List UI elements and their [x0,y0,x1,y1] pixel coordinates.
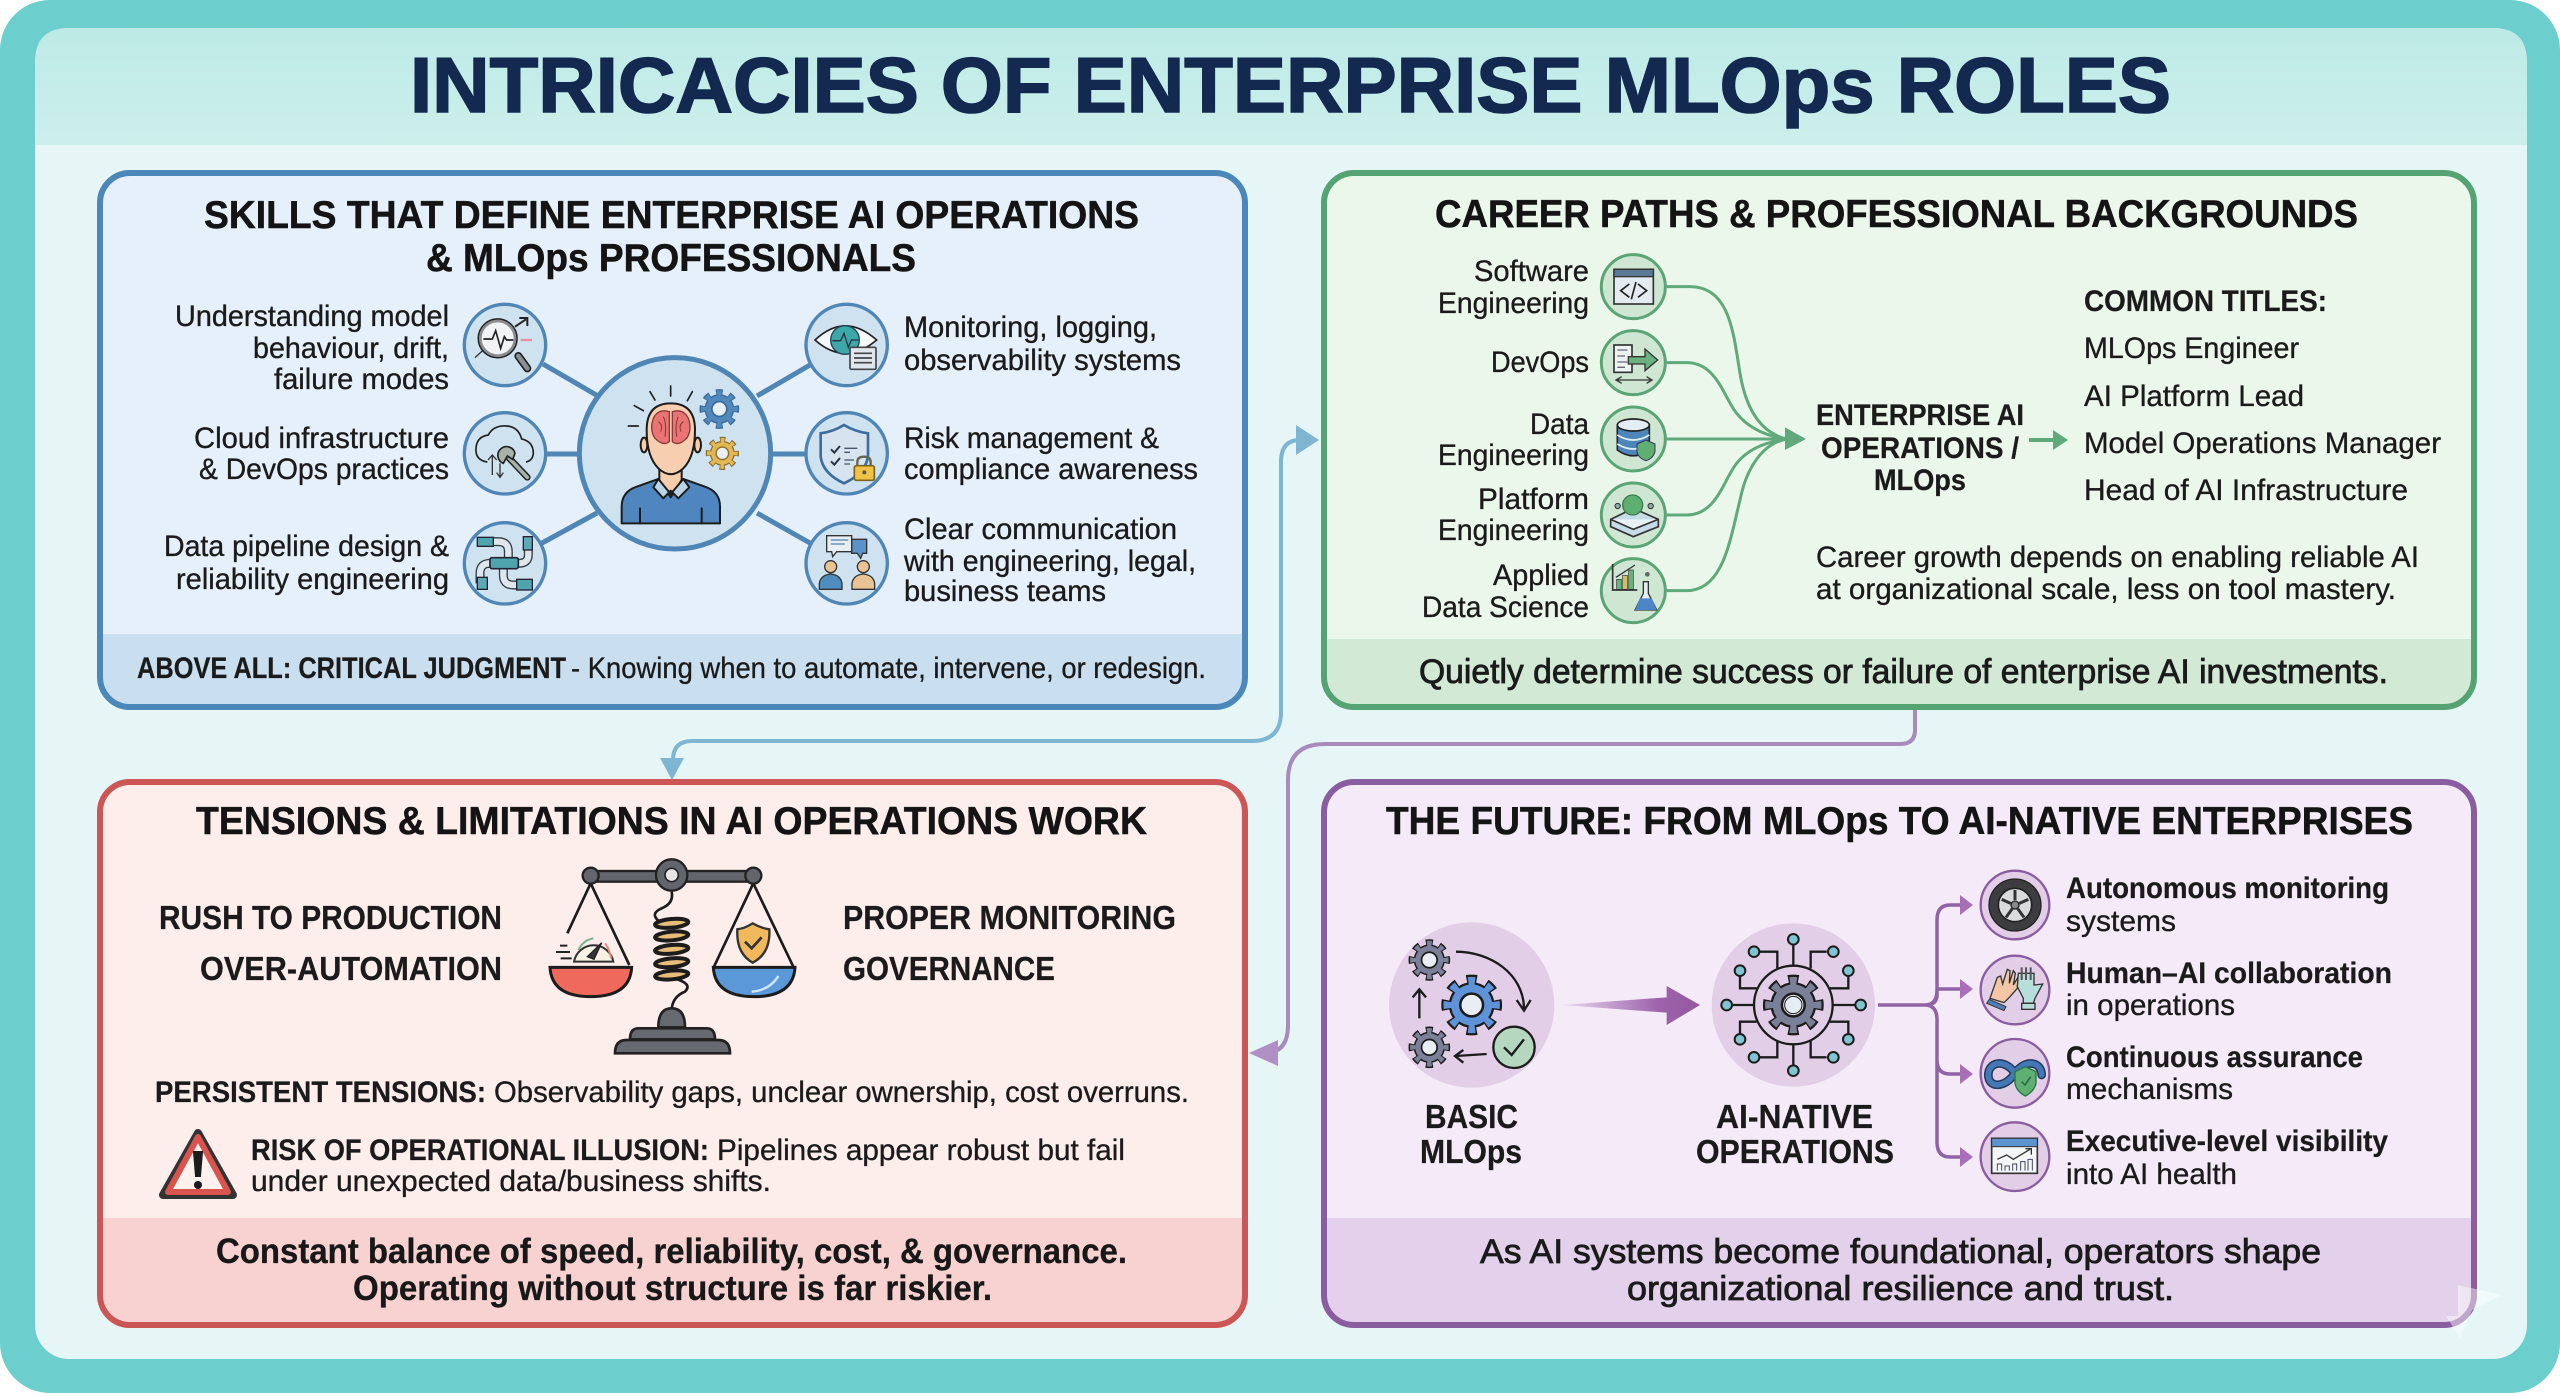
panel: tensions [98,780,1247,1327]
list: future outcomes [2066,872,2392,1191]
label: basic MLOps: BASIC [1425,1098,1518,1135]
text: cloud: Cloud infrastructure [194,422,449,455]
labels: backgrounds: Engineering [1438,439,1589,472]
heading: & MLOps PROFESSIONALS [426,237,916,280]
icon: magnifier [464,304,546,386]
list: common titles: COMMON TITLES: [2084,285,2327,318]
list: future outcomes: systems [2066,905,2176,938]
title: INTRICACIES OF ENTERPRISE MLOps ROLES [410,41,2171,129]
icon: infinity assurance loop [1988,1063,2042,1096]
watermark sparkle [2446,1285,2502,1338]
labels: backgrounds: DevOps [1491,346,1589,379]
text: risk [904,422,1198,486]
text: cloud: & DevOps practices [199,453,449,486]
text: operational illusion risk: Pipelines appear robust but fail [717,1134,1125,1167]
list: future outcomes: Continuous assurance [2066,1041,2363,1074]
callout: future footer: As AI systems become foundational, operators shape [1480,1233,2321,1271]
text: enterprise AI operations: MLOps [1874,464,1966,497]
list: future outcomes: into AI health [2066,1158,2237,1191]
icon: database [1617,419,1655,461]
labels: safeguards: PROPER MONITORING [843,899,1176,936]
text: communication: Clear communication [904,513,1177,546]
labels: backgrounds: Applied [1493,559,1589,592]
labels: backgrounds: Software [1474,255,1589,288]
callout: future footer [1480,1233,2321,1308]
text: data pipeline [164,530,449,596]
icon: cloud and wrench [464,413,546,494]
icon cluster: skills [464,304,887,604]
labels: pressures: RUSH TO PRODUCTION [159,899,502,936]
skill connectors [542,364,810,543]
panel: career paths [1322,171,2476,709]
heading: THE FUTURE: FROM MLOps TO AI-NATIVE ENTERPRISES [1386,800,2413,843]
panel: future [1322,780,2476,1327]
arrow: future flow connector [1249,709,1915,1066]
callout: critical judgment [137,652,1206,685]
text: career growth: at organizational scale, less on tool mastery. [1816,573,2396,606]
list: future outcomes: in operations [2066,989,2235,1022]
icon: basic MLOps cycle [1389,922,1554,1088]
label: AI-native operations: OPERATIONS [1696,1133,1894,1170]
text: enterprise AI operations [1816,399,2024,497]
callout: career footer: Quietly determine success or failure of enterprise AI investments. [1419,653,2388,691]
text: communication: with engineering, legal, [903,545,1196,578]
list: future outcomes: mechanisms [2066,1073,2233,1106]
list: common titles: MLOps Engineer [2084,332,2299,365]
arrows: outcome branches [1878,895,1973,1167]
text: monitoring [904,311,1181,377]
arrow: progression [1562,986,1700,1025]
heading: CAREER PATHS & PROFESSIONAL BACKGROUNDS [1435,193,2358,236]
text: operational illusion risk: RISK OF OPERATIONAL ILLUSION: [251,1134,709,1167]
list: common titles: AI Platform Lead [2084,380,2304,413]
labels: backgrounds: Platform [1478,483,1589,516]
text: model behaviour: behaviour, drift, [253,332,449,365]
labels: pressures [159,899,502,987]
callout: critical judgment: - Knowing when to automate, intervene, or redesign. [571,652,1206,685]
labels: safeguards [843,899,1176,987]
icon: conversation between two people [806,523,887,604]
icon: autonomous wheel [1989,879,2041,931]
list: common titles [2084,285,2441,507]
text: data pipeline: Data pipeline design & [164,530,449,563]
icon: AI-native circuit gear [1712,923,1875,1087]
icon: chart and flask [1613,564,1657,610]
text: persistent tensions: PERSISTENT TENSIONS: [155,1076,486,1109]
labels: safeguards: GOVERNANCE [843,950,1055,987]
text: persistent tensions [155,1076,1189,1109]
text: career growth [1816,541,2419,606]
text: cloud [194,422,449,486]
text: model behaviour [175,300,449,396]
callout: tensions footer: Constant balance of speed, reliability, cost, & governance. [216,1232,1127,1271]
diagram: background icons and converging arrows [1601,255,1806,623]
icon: eye and log document [806,304,887,386]
labels: backgrounds: Engineering [1438,287,1589,320]
list: future outcomes: Executive-level visibility [2066,1125,2388,1158]
icon: executive dashboard [1992,1138,2037,1173]
text: model behaviour: failure modes [274,363,449,396]
text: data pipeline: reliability engineering [176,563,449,596]
arrow: skills flow connector [660,425,1319,780]
labels: backgrounds: Data [1530,408,1589,441]
label: basic MLOps: MLOps [1420,1133,1522,1170]
text: monitoring: observability systems [904,344,1181,377]
label: AI-native operations: AI-NATIVE [1716,1098,1873,1135]
icon: shield and lock [806,413,887,494]
text: career growth: Career growth depends on enabling reliable AI [1816,541,2419,574]
text: operational illusion risk: under unexpected data/business shifts. [251,1165,771,1198]
text: operational illusion risk [251,1134,1125,1198]
callout: critical judgment: ABOVE ALL: CRITICAL JUDGMENT [137,652,566,685]
icon: balance scale [550,859,795,1053]
icon: central person with brain and gears [579,358,771,549]
labels: backgrounds: Engineering [1438,514,1589,547]
heading: TENSIONS & LIMITATIONS IN AI OPERATIONS WORK [196,800,1147,843]
panel: skills [98,171,1247,709]
list: future outcomes: Human–AI collaboration [2066,957,2392,990]
text: persistent tensions: Observability gaps, unclear ownership, cost overruns. [494,1076,1189,1109]
heading [204,194,1139,280]
labels: backgrounds: Data Science [1422,591,1589,624]
icons: future outcomes [1981,871,2049,1191]
text: communication [903,513,1196,608]
icon: devops deployment [1614,345,1658,383]
text: enterprise AI operations: ENTERPRISE AI [1816,399,2024,432]
diagram: basic MLOps to AI-native [1389,922,1875,1088]
callout: tensions footer [216,1232,1127,1308]
text: risk: Risk management & [904,422,1159,455]
text: risk: compliance awareness [904,453,1198,486]
labels: backgrounds [1422,255,1589,624]
heading: SKILLS THAT DEFINE ENTERPRISE AI OPERATIONS [204,194,1139,237]
list: common titles: Model Operations Manager [2084,427,2441,460]
text: monitoring: Monitoring, logging, [904,311,1157,344]
callout: tensions footer: Operating without structure is far riskier. [353,1269,992,1308]
icon: human and robot hands [1987,967,2043,1011]
arrow: to common titles [2029,430,2068,450]
list: future outcomes: Autonomous monitoring [2066,872,2389,905]
list: common titles: Head of AI Infrastructure [2084,474,2408,507]
label: AI-native operations [1696,1098,1894,1170]
label: basic MLOps [1420,1098,1522,1170]
icon: pipelines [464,523,546,604]
icon: platform [1611,495,1658,537]
icon: warning triangle [163,1133,233,1195]
icon: code window [1614,269,1653,304]
text: model behaviour: Understanding model [175,300,449,333]
labels: pressures: OVER-AUTOMATION [200,950,502,987]
text: enterprise AI operations: OPERATIONS / [1821,432,2020,465]
text: communication: business teams [904,575,1106,608]
callout: future footer: organizational resilience and trust. [1627,1270,2174,1308]
